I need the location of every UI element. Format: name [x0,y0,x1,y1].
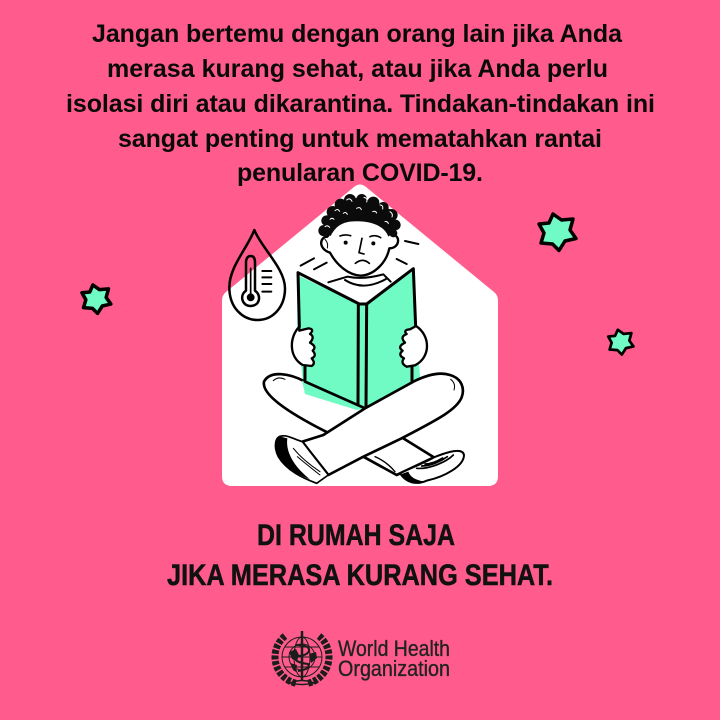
heading: advice text: merasa kurang sehat, atau jika Anda perlu [107,55,608,83]
logo wordmark: World Health [338,636,450,661]
emblem [275,631,329,684]
logo wordmark [338,636,450,681]
tagline [167,519,553,592]
icon: large star [539,214,576,250]
heading: advice text: Jangan bertemu dengan orang lain jika Anda [92,20,623,48]
heading: advice text [66,20,655,187]
right hand [400,326,427,367]
illustration: person reading a book [229,194,464,483]
person head [318,194,401,276]
tagline: JIKA MERASA KURANG SEHAT. [167,559,553,592]
left hand [292,327,315,366]
icon: star left [82,285,111,313]
book mint fill [297,271,420,410]
book outlines [298,269,416,408]
icon: small star right [608,330,633,355]
front leg [302,374,463,475]
tagline: DI RUMAH SAJA [257,519,455,552]
heading: advice text: sangat penting untuk mematahkan rantai [118,125,602,153]
icon: thermometer drop [229,230,285,320]
heading: advice text: isolasi diri atau dikarantina. Tindakan-tindakan ini [66,90,655,118]
heading: advice text: penularan COVID-19. [237,159,483,187]
icon: house background [222,184,498,486]
right shoe [400,451,464,483]
left shoe [275,436,328,483]
crossed legs [264,374,464,483]
logo wordmark: Organization [338,656,450,681]
logo: World Health Organization [275,631,450,684]
motion dashes [301,241,418,269]
rear leg and foot [264,374,434,475]
shirt collar [328,274,391,286]
mint patch over rear thigh [302,381,365,410]
